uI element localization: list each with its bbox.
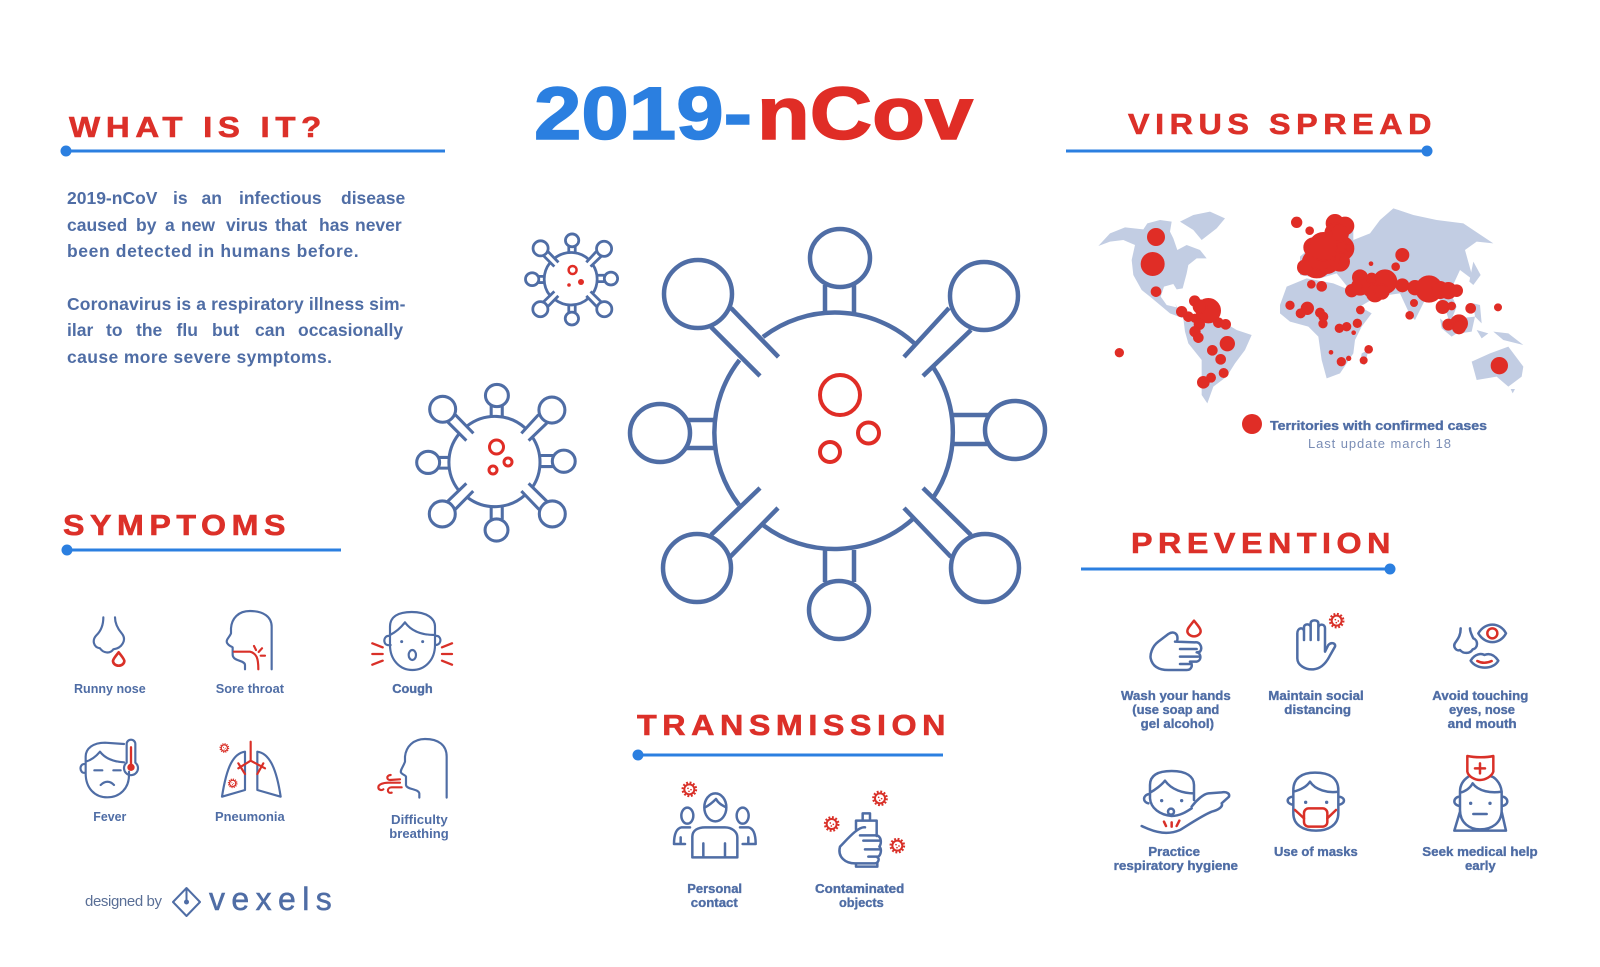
heading: symptoms: SYMPTOMS	[63, 510, 291, 542]
icon: wash hands	[1151, 621, 1201, 670]
transmission labels: objects	[839, 895, 884, 910]
heading: virus spread	[1066, 109, 1437, 156]
prevention labels: gel alcohol)	[1141, 716, 1214, 731]
icon: avoid touching face	[1454, 625, 1506, 668]
icon: sore throat	[227, 611, 272, 669]
text block: description: never	[355, 215, 402, 235]
text block: description: can	[255, 320, 285, 340]
text block: description: disease	[341, 188, 405, 208]
heading: transmission: TRANSMISSION	[637, 710, 951, 742]
icon: contaminated objects	[825, 792, 904, 867]
prevention labels: (use soap and	[1132, 702, 1219, 717]
symptom labels: Sore throat	[216, 681, 285, 696]
text block: description: virus	[226, 215, 268, 235]
medium virus illustration	[417, 384, 575, 541]
map legend: Territories with confirmed cases	[1270, 418, 1487, 433]
icon: use of masks	[1288, 773, 1344, 831]
prevention labels: Practice	[1148, 844, 1200, 859]
transmission labels	[687, 881, 904, 910]
heading: virus spread: VIRUS SPREAD	[1128, 109, 1437, 141]
prevention labels: Seek medical help	[1422, 844, 1538, 859]
panel: virus spread	[1066, 109, 1523, 451]
text block: description: caused	[67, 215, 127, 235]
text block: description: flu	[176, 320, 198, 340]
text block: description: ilar	[67, 320, 93, 340]
panel: what is it	[60, 112, 445, 367]
icon: cough	[372, 612, 452, 670]
icon: social distancing hand	[1297, 614, 1343, 669]
title	[534, 72, 973, 155]
map legend	[1242, 414, 1487, 451]
icon: seek medical help	[1454, 756, 1507, 831]
symptom labels: Cough	[392, 681, 433, 696]
title: 2019-	[534, 72, 752, 155]
prevention labels: respiratory hygiene	[1114, 858, 1238, 873]
logo: designed by vexels: vexels	[209, 881, 332, 917]
icon: personal contact	[674, 783, 756, 857]
icon: fever	[81, 740, 138, 797]
text block: description: cause more severe symptoms.	[67, 347, 332, 367]
symptom labels: Difficulty	[391, 812, 448, 827]
heading: what is it: WHAT IS IT?	[69, 112, 327, 144]
map legend: Last update march 18	[1308, 436, 1451, 451]
logo: designed by vexels	[85, 881, 332, 917]
prevention labels: Maintain social	[1268, 688, 1364, 703]
central large virus illustration	[630, 229, 1045, 639]
heading: prevention	[1081, 528, 1396, 574]
text block: description: Coronavirus is a respiratory illness sim-	[67, 294, 406, 314]
panel: transmission	[632, 710, 951, 910]
text block: description: has	[319, 215, 349, 235]
heading: transmission	[632, 710, 951, 760]
text block: description: but	[212, 320, 239, 340]
text block: description	[67, 188, 406, 367]
panel: symptoms	[62, 510, 452, 841]
text block: description: by	[136, 215, 157, 235]
map: confirmed case markers	[1115, 215, 1507, 388]
prevention labels: Avoid touching	[1432, 688, 1528, 703]
heading: what is it	[60, 112, 445, 156]
small virus illustration	[525, 234, 618, 325]
text block: description: an	[202, 188, 222, 208]
text block: description: been detected in humans before.	[67, 241, 359, 261]
text block: description: the	[136, 320, 163, 340]
symptom labels	[74, 681, 449, 841]
world map	[1098, 208, 1523, 403]
prevention labels: and mouth	[1448, 716, 1517, 731]
text block: description: occasionally	[298, 320, 403, 340]
prevention labels: Wash your hands	[1121, 688, 1231, 703]
symptom labels: Pneumonia	[215, 809, 285, 824]
title: nCov	[757, 72, 973, 155]
text block: description: that	[275, 215, 307, 235]
text block: description: 2019-nCoV	[67, 188, 158, 208]
text block: description: infectious	[239, 188, 322, 208]
symptom labels: Fever	[93, 809, 126, 824]
transmission labels: contact	[691, 895, 738, 910]
icon: difficulty breathing	[378, 739, 447, 798]
icon: runny nose	[94, 617, 124, 666]
map: continents	[1098, 208, 1523, 403]
heading: symptoms	[62, 510, 341, 556]
transmission labels: Contaminated	[815, 881, 904, 896]
text block: description: to	[106, 320, 123, 340]
prevention labels: Use of masks	[1274, 844, 1358, 859]
prevention labels	[1114, 688, 1538, 873]
prevention labels: eyes, nose	[1449, 702, 1515, 717]
text block: description: is	[173, 188, 188, 208]
symptom labels: breathing	[389, 826, 449, 841]
panel: prevention	[1081, 528, 1538, 873]
icon: respiratory hygiene	[1142, 771, 1229, 833]
heading: prevention: PREVENTION	[1131, 528, 1396, 560]
logo: designed by vexels: designed by	[85, 893, 162, 910]
prevention labels: distancing	[1284, 702, 1351, 717]
text block: description: new	[181, 215, 215, 235]
transmission labels: Personal	[687, 881, 742, 896]
text block: description: a	[165, 215, 175, 235]
prevention labels: early	[1465, 858, 1496, 873]
symptom labels: Runny nose	[74, 681, 146, 696]
icon: pneumonia	[220, 742, 281, 797]
